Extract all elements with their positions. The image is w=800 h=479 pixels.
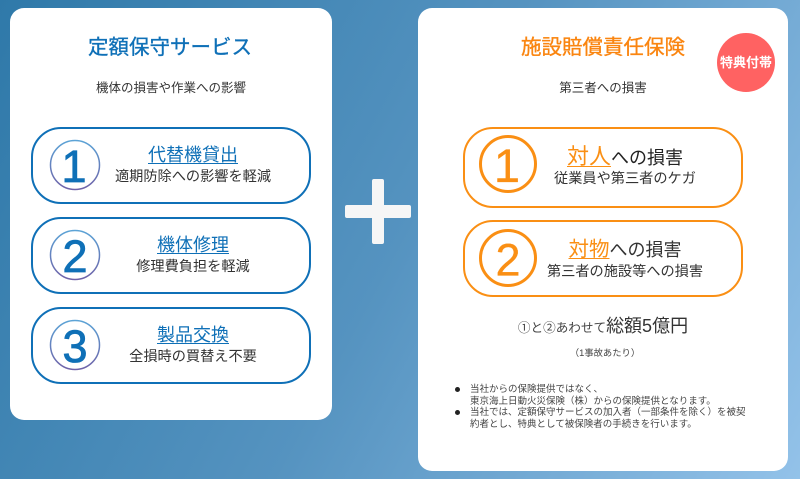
icon: number 3 <box>50 320 100 372</box>
item 3: product exchange <box>31 307 311 384</box>
footnotes list <box>455 384 746 430</box>
item title: 対物への損害 <box>568 238 682 261</box>
item description: 従業員や第三者のケガ <box>554 171 696 187</box>
badge: benefit included <box>717 33 775 92</box>
item description: 第三者の施設等への損害 <box>547 264 703 280</box>
item title: 代替機貸出 <box>148 145 238 165</box>
icon: number 2: 2 <box>495 234 520 285</box>
item description: 全損時の買替え不要 <box>129 349 257 365</box>
item title: 機体修理 <box>157 235 229 255</box>
item 2: airframe repair <box>31 217 311 294</box>
item title: 対人への損害 <box>567 144 683 169</box>
item description: 適期防除への影響を軽減 <box>115 169 271 185</box>
icon: number 1 <box>479 135 537 193</box>
item 1: replacement loan <box>31 127 311 204</box>
panel: facility liability insurance <box>418 8 788 471</box>
icon: number 2 <box>50 230 100 282</box>
icon: number 2: 2 <box>62 231 88 282</box>
subheading: damage and work impact: 機体の損害や作業への影響 <box>96 81 246 95</box>
total coverage amount: ①と②あわせて総額5億円 <box>518 316 688 336</box>
icon: number 1: 1 <box>61 141 87 192</box>
footnote 1 <box>455 384 716 407</box>
heading: liability insurance: 施設賠償責任保険 <box>521 36 685 59</box>
footnote 1: 当社からの保険提供ではなく、 <box>470 384 603 395</box>
heading: maintenance service: 定額保守サービス <box>88 36 252 59</box>
icon: number 1 <box>50 140 100 192</box>
subheading: third-party damage: 第三者への損害 <box>559 81 647 95</box>
icon: plus sign <box>345 179 411 244</box>
footnote 2: 当社では、定額保守サービスの加入者（一部条件を除く）を被契 <box>470 407 746 418</box>
per-accident note: （1事故あたり） <box>570 348 640 358</box>
panel: fixed-fee maintenance service <box>10 8 332 420</box>
item 1: bodily injury <box>463 127 743 208</box>
badge: benefit included: 特典付帯 <box>720 55 772 70</box>
icon: number 3: 3 <box>62 321 88 372</box>
item description: 修理費負担を軽減 <box>136 259 250 275</box>
footnote 2 <box>455 406 746 430</box>
icon: number 2 <box>479 229 537 287</box>
item 2: property damage <box>463 220 743 297</box>
icon: number 1: 1 <box>493 139 520 192</box>
item title: 製品交換 <box>157 325 229 345</box>
footnote 2: 約者とし、特典として被保険者の手続きを行います。 <box>470 419 697 430</box>
footnote 1: 東京海上日動火災保険（株）からの保険提供となります。 <box>470 396 716 407</box>
